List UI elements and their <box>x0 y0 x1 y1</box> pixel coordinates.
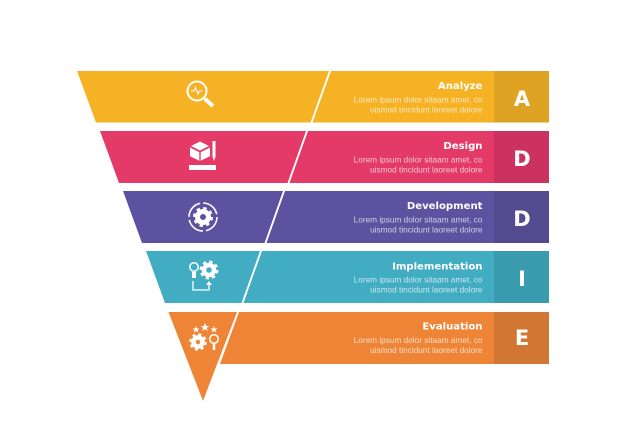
letter tab: I <box>494 251 549 303</box>
panel: Evaluation row <box>168 312 549 401</box>
panel: Analyze row <box>77 71 549 122</box>
heading: Design: Design <box>443 141 482 152</box>
letter: I: I <box>518 267 526 291</box>
funnel segment: Design <box>100 131 306 183</box>
text bar: Design <box>290 131 494 183</box>
letter: D: D <box>513 147 531 171</box>
letter tab: E <box>494 312 549 364</box>
description: Analyze: Lorem ipsum dolor sitaam amet, co <box>354 96 482 104</box>
letter tab: A <box>494 71 549 122</box>
letter: D: D <box>513 207 531 231</box>
description: Evaluation: Lorem ipsum dolor sitaam amet, co <box>354 336 482 345</box>
letter tab: D <box>494 191 549 243</box>
icon: cube, pencil and ruler <box>189 141 216 170</box>
text bar: Implementation <box>244 251 494 303</box>
letter tab: D <box>494 131 549 183</box>
description: Development: uismod tincidunt laoreet dolore <box>370 226 483 235</box>
heading: Evaluation: Evaluation <box>422 322 482 332</box>
description: Design: uismod tincidunt laoreet dolore <box>370 166 483 175</box>
funnel segment: Analyze <box>77 71 329 122</box>
icon: magnifier with pulse <box>188 82 213 106</box>
heading: Analyze: Analyze <box>438 81 483 92</box>
funnel segment: Implementation <box>146 251 260 303</box>
description: Development: Lorem ipsum dolor sitaam amet, co <box>354 216 482 224</box>
funnel segment: Development <box>123 191 283 243</box>
description: Implementation: Lorem ipsum dolor sitaam amet, co <box>354 276 482 284</box>
description: Evaluation: uismod tincidunt laoreet dolore <box>370 346 483 355</box>
panel: Design row <box>100 131 549 183</box>
panel: Development row <box>123 191 549 243</box>
panel: Implementation row <box>146 251 549 303</box>
icon: gear with cycle arrows <box>189 203 217 231</box>
letter: A: A <box>514 87 531 111</box>
description: Analyze: uismod tincidunt laoreet dolore <box>370 106 483 115</box>
text bar: Development <box>266 191 494 243</box>
description: Implementation: uismod tincidunt laoreet dolore <box>370 286 483 295</box>
heading: Development: Development <box>407 201 483 212</box>
heading: Implementation: Implementation <box>392 262 482 272</box>
text bar: Evaluation <box>220 312 494 364</box>
letter: E: E <box>515 326 529 350</box>
icon: stars, gear and magnifier <box>190 323 218 350</box>
description: Design: Lorem ipsum dolor sitaam amet, co <box>354 156 482 164</box>
funnel tip: Evaluation <box>168 312 237 401</box>
icon: bulb, gear and arrow <box>190 262 217 290</box>
text bar: Analyze <box>312 71 494 122</box>
